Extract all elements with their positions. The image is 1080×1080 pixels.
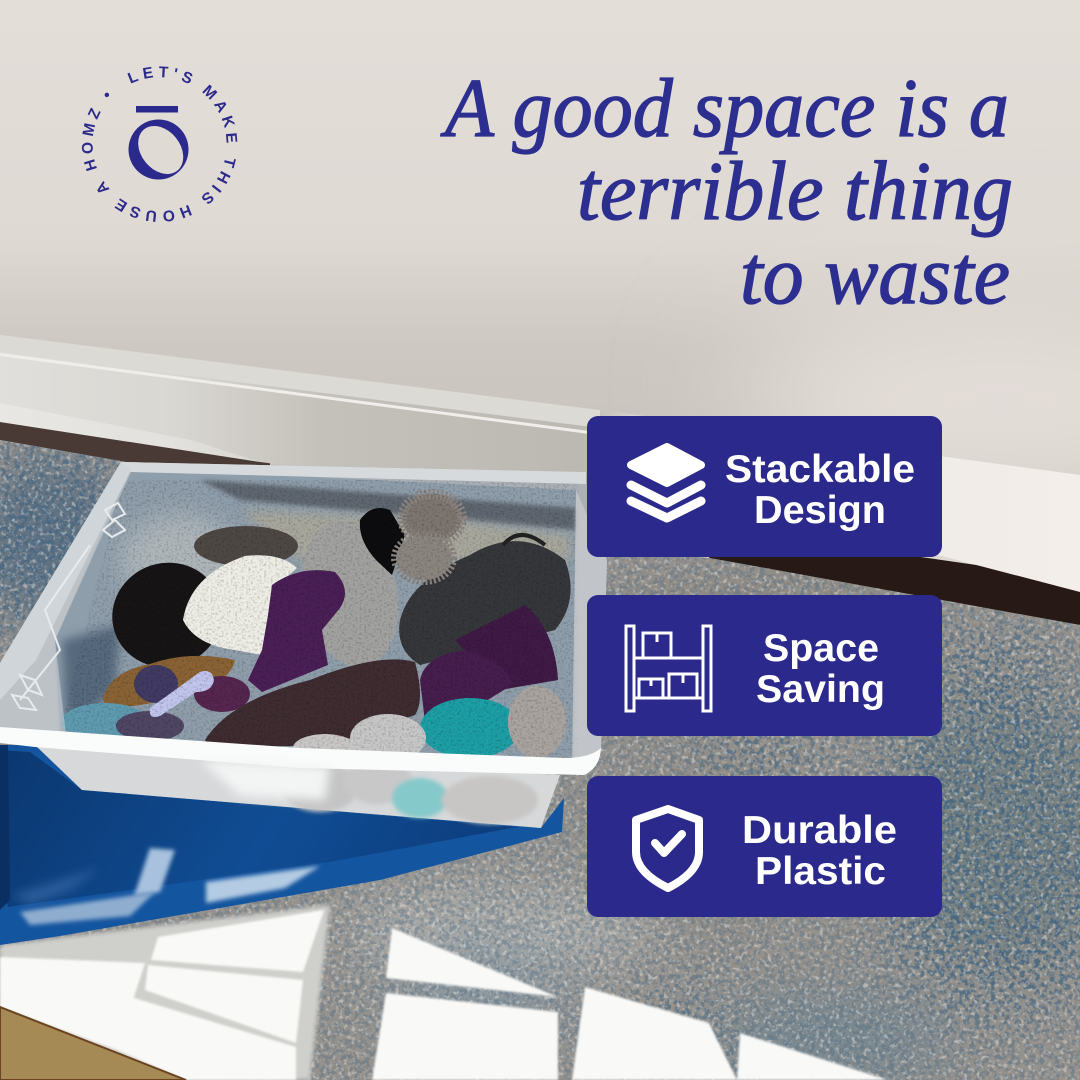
background: dark floor strip	[0, 418, 1080, 625]
clear plastic tub with yarn	[0, 462, 607, 828]
tub front wall	[35, 745, 560, 828]
label: durable plastic	[742, 809, 897, 893]
tub outer wall highlights	[0, 462, 586, 700]
yarn: black pom	[360, 508, 405, 575]
yarn: purple knit right front	[420, 650, 512, 722]
panel: space saving	[587, 595, 942, 736]
panel: durable plastic	[587, 776, 942, 917]
yarn: teal ball	[420, 698, 514, 756]
label: durable plastic: Plastic	[755, 850, 886, 893]
logo: macron bar	[136, 106, 178, 112]
yarn texture	[60, 480, 580, 770]
logo: circular tagline: LET'S MAKE THIS HOUSE A HOMZ •	[82, 66, 238, 222]
icon: shield with check	[636, 809, 699, 888]
yarn pile	[61, 494, 571, 762]
logo: circular badge	[82, 66, 238, 222]
label: durable plastic: Durable	[742, 809, 897, 852]
tub left wall ridge and diamonds	[12, 503, 125, 710]
icon: warehouse shelf	[626, 626, 711, 711]
title: to waste	[740, 229, 1010, 322]
label: stackable design: Design	[754, 489, 886, 532]
background: light gaps between sunlight patches	[0, 905, 330, 1080]
label: stackable design	[725, 448, 915, 532]
yarn: white ball	[183, 555, 297, 655]
yarn: dark grey top	[194, 526, 298, 566]
yarn: dark brown skein	[205, 659, 420, 748]
label: stackable design: Stackable	[725, 448, 915, 491]
label: space saving	[756, 627, 885, 711]
tub rim	[0, 727, 601, 775]
yarn: light grey front	[350, 714, 426, 752]
title: terrible thing	[577, 145, 1013, 238]
background: patterned rug	[0, 430, 1080, 1080]
crochet hook	[150, 671, 214, 717]
icon: stacked layers	[631, 447, 701, 518]
yarn: variegated blue skein	[62, 703, 142, 736]
yarn: grey ball	[302, 561, 398, 666]
title	[440, 62, 1013, 322]
yarn: fluffy grey pom	[396, 494, 462, 580]
label: space saving: Saving	[756, 668, 885, 711]
yarn: charcoal loop	[503, 535, 545, 545]
background: wood floor corner	[0, 1007, 186, 1080]
yarn: purple strand	[194, 676, 250, 712]
tub interior back and walls	[0, 462, 607, 775]
label: space saving: Space	[763, 627, 879, 670]
blue storage lid	[0, 745, 564, 945]
yarn: variegated orange skein	[103, 656, 235, 708]
background: wall	[0, 0, 1080, 510]
rug seen through tub	[55, 468, 576, 770]
yarn: purple knit left	[248, 570, 345, 692]
yarn seen through front wall	[282, 760, 538, 824]
panel: stackable design	[587, 416, 942, 557]
background: sunlight patches	[0, 910, 888, 1080]
logo: o mark	[128, 117, 193, 183]
background: baseboard	[0, 335, 1080, 592]
yarn: light grey right	[508, 686, 566, 758]
title: A good space is a	[440, 62, 1009, 155]
yarn: black ball	[112, 562, 212, 664]
yarn: purple knit right back	[455, 605, 558, 690]
yarn: charcoal skein	[399, 541, 571, 665]
